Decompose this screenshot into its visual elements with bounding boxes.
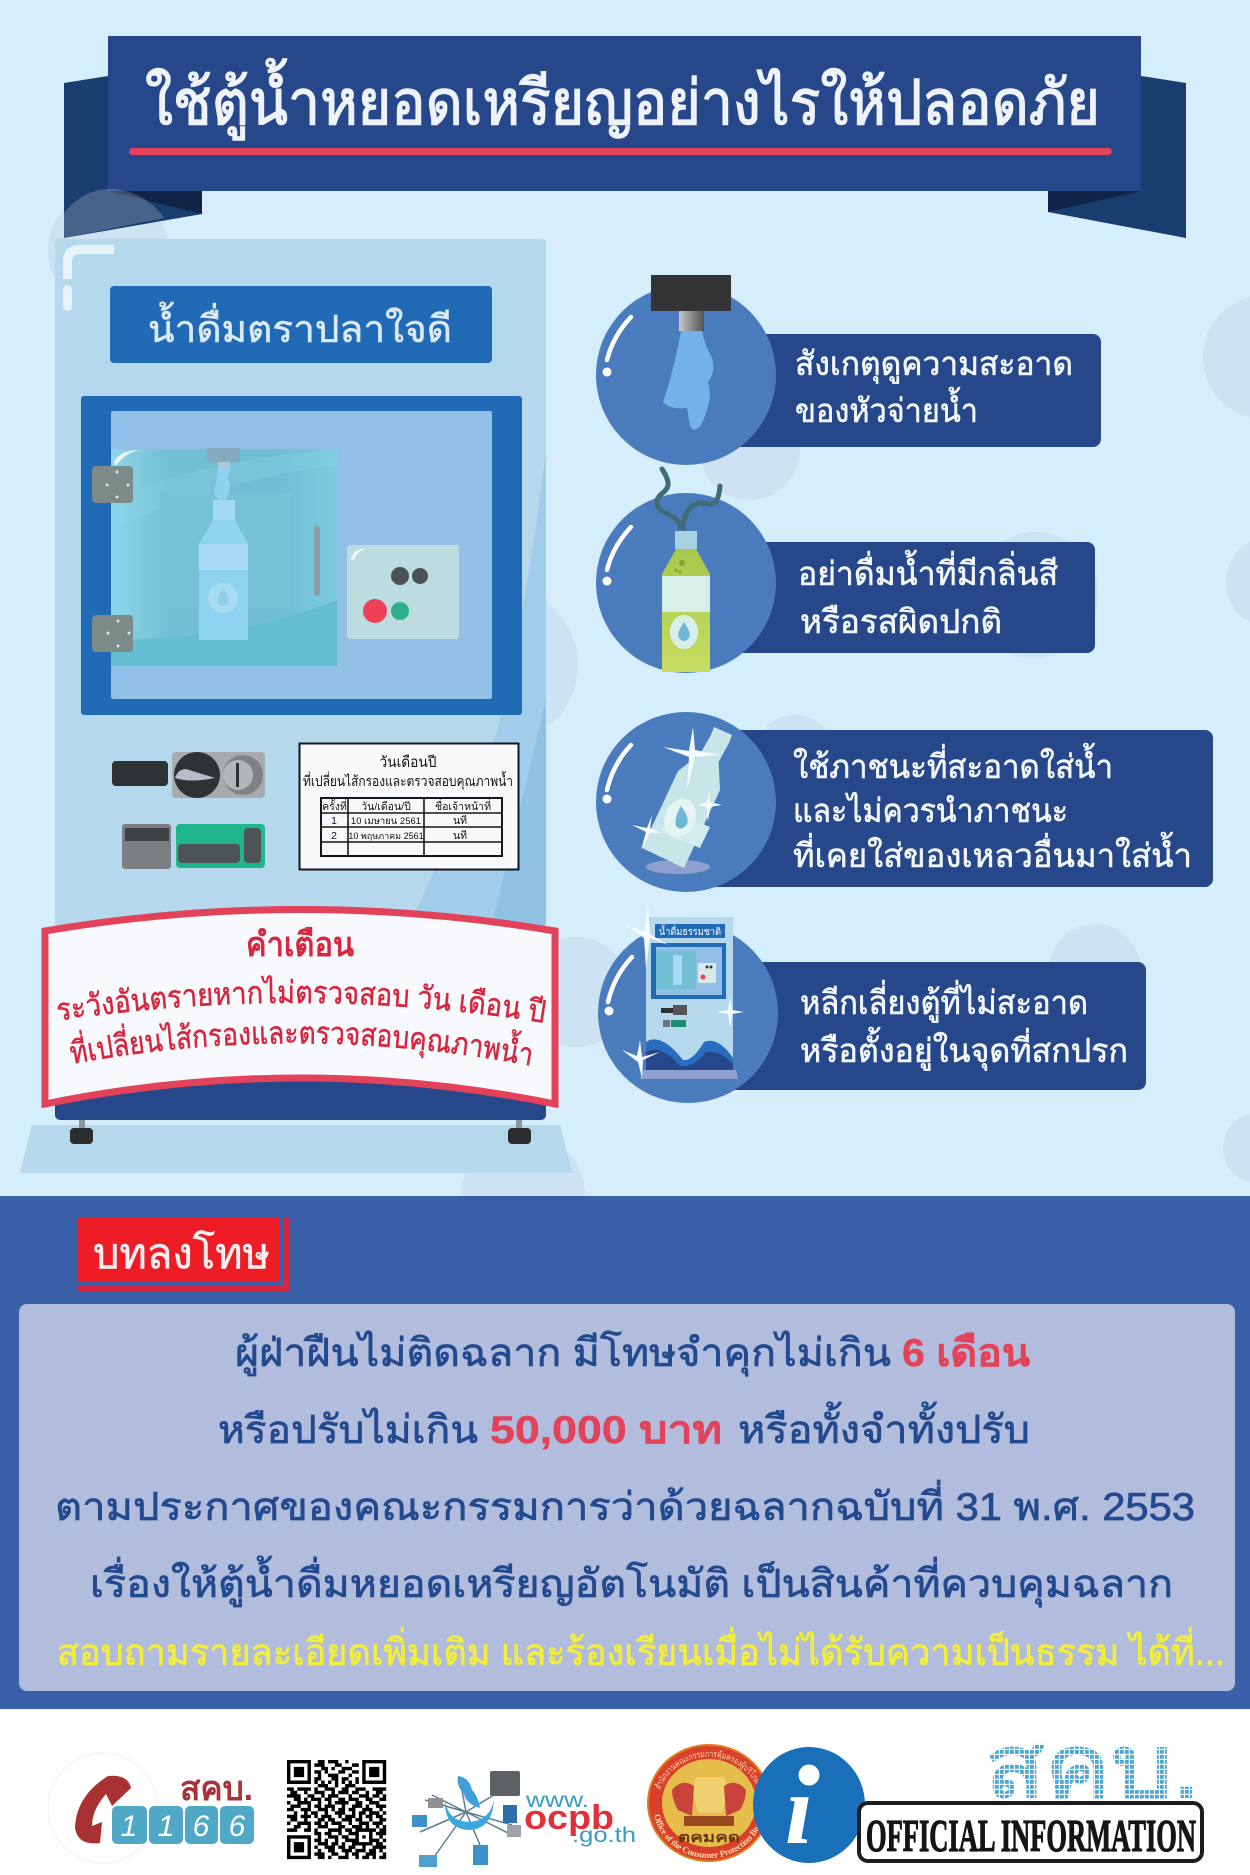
- odour wisps: [657, 469, 720, 528]
- penalties heading: บทลงโทษ: [93, 1229, 270, 1277]
- penalties panel: 50,000 บาท: [490, 1409, 722, 1452]
- warning sign: ที่เปลี่ยนไส้กรองและตรวจสอบคุณภาพน้ำ: [70, 1022, 532, 1066]
- QR code: [287, 1760, 386, 1859]
- warning sign: คำเตือน: [246, 926, 354, 964]
- information icon: ı: [785, 1754, 813, 1865]
- brand label: น้ำดื่มตราปลาใจดี: [148, 301, 452, 351]
- penalties panel: หรือปรับไม่เกิน: [218, 1408, 478, 1452]
- glass door: [92, 448, 337, 666]
- penalties panel: [19, 1304, 1235, 1691]
- service table: 10 เมษายน 2561: [351, 816, 421, 827]
- tip 3: clean container: และไม่ควรนำภาชนะ: [793, 792, 1068, 829]
- hotline logo: 6: [229, 1810, 246, 1843]
- penalties panel: ตามประกาศของคณะกรรมการว่าด้วยฉลากฉบับที่ 31 พ.ศ. 2553: [55, 1480, 1195, 1529]
- consumer protection seal: สำนักงานคณะกรรมการคุ้มครองผู้บริโภค: [654, 1750, 759, 1790]
- hotline logo: 1: [158, 1810, 174, 1843]
- tip 2: smelly bottle: หรือรสผิดปกติ: [800, 603, 1002, 640]
- seal emblem: [672, 1777, 746, 1826]
- hotline logo: [48, 1753, 254, 1863]
- glass highlight: [63, 245, 114, 311]
- button panel: [347, 545, 459, 639]
- machine body: [55, 239, 546, 1099]
- tip 2: smelly bottle: [596, 469, 1095, 673]
- mini vending machine: [640, 917, 738, 1079]
- coin slot: [112, 761, 168, 786]
- sparkles: [632, 727, 722, 850]
- consumer protection seal: [647, 1744, 762, 1862]
- door handle: [314, 525, 320, 596]
- hotline logo: 6: [193, 1810, 210, 1843]
- title underline: [129, 148, 1112, 155]
- service table: ครั้งที่: [322, 799, 347, 813]
- dotted agency wordmark: สคบ.: [985, 1717, 1200, 1816]
- information icon: [753, 1747, 865, 1865]
- tip 1: dispenser head: [596, 275, 1101, 465]
- mini vending machine: น้ำดื่มธรรมชาติ: [659, 924, 721, 938]
- penalties heading: [78, 1217, 290, 1292]
- consumer protection seal: ตคมคด: [678, 1829, 740, 1845]
- title ribbon: [64, 36, 1186, 238]
- title text: ใช้ตู้น้ำหยอดเหรียญอย่างไรให้ปลอดภัย: [145, 58, 1100, 140]
- floor shadow: [20, 1125, 572, 1173]
- vending machine: [20, 239, 572, 1173]
- website logo: ocpb: [524, 1799, 614, 1837]
- service table: 1: [331, 815, 337, 827]
- tip 1: dispenser head: ของหัวจ่ายน้ำ: [795, 387, 978, 429]
- penalties panel: 6 เดือน: [902, 1332, 1030, 1375]
- tip 2: smelly bottle: อย่าดื่มน้ำที่มีกลิ่นสี: [798, 550, 1058, 592]
- service table: [321, 798, 502, 856]
- service table: 10 พฤษภาคม 2561: [348, 831, 424, 841]
- penalties panel: เรื่องให้ตู้น้ำดื่มหยอดเหรียญอัตโนมัติ เป็นสินค้าที่ควบคุมฉลาก: [90, 1555, 1173, 1608]
- translucent bubble over ribbon: [64, 189, 164, 238]
- coin return plate: [172, 752, 265, 798]
- service table: วัน/เดือน/ปี: [361, 800, 411, 813]
- penalties panel: สอบถามรายละเอียดเพิ่มเติม และร้องเรียนเมื่อไม่ได้รับความเป็นธรรม ได้ที่...: [57, 1626, 1225, 1673]
- hotline logo: สคบ.: [180, 1770, 253, 1808]
- sparkles: [622, 905, 744, 1078]
- bill acceptor: [176, 824, 265, 868]
- service table: นที: [453, 829, 467, 842]
- website logo: .go.th: [572, 1824, 636, 1847]
- service table: ชื่อเจ้าหน้าที่: [435, 799, 491, 813]
- consumer protection seal: Office of the Consumer Protection Board: [654, 1814, 758, 1858]
- filter service notice: ที่เปลี่ยนไส้กรองและตรวจสอบคุณภาพน้ำ: [303, 771, 513, 790]
- brand label: [110, 286, 492, 363]
- penalties section: [0, 1196, 1250, 1709]
- nozzle and water stream: [207, 448, 240, 500]
- hotline logo: 1: [121, 1810, 137, 1843]
- bottle: [199, 500, 248, 640]
- door hinges: [92, 466, 133, 652]
- tip 4: clean machine: [598, 905, 1146, 1103]
- warning sign: ระวังอันตรายหากไม่ตรวจสอบ วัน เดือน ปี: [58, 975, 546, 1023]
- tip 3: clean container: ที่เคยใส่ของเหลวอื่นมาใส่น้ำ: [793, 832, 1192, 874]
- filter service notice: [300, 744, 518, 870]
- tip 3: clean container: [596, 712, 1213, 892]
- website logo: www.: [525, 1789, 589, 1812]
- coin tray: [122, 824, 171, 869]
- machine wheels: [70, 1118, 531, 1144]
- tip 1: dispenser head: สังเกตุดูความสะอาด: [795, 345, 1073, 384]
- penalties panel: หรือทั้งจำทั้งปรับ: [738, 1401, 1030, 1452]
- tip 4: clean machine: หลีกเลี่ยงตู้ที่ไม่สะอาด: [800, 980, 1088, 1023]
- warning sign: [42, 906, 558, 1108]
- tip 3: clean container: ใช้ภาชนะที่สะอาดใส่น้ำ: [793, 743, 1113, 785]
- footer: [0, 1709, 1250, 1875]
- service table: 2: [331, 830, 337, 842]
- background bubbles: [48, 190, 1250, 1257]
- dispenser window: [81, 396, 522, 715]
- service table: นที: [453, 814, 467, 827]
- filter service notice: วันเดือนปี: [380, 754, 436, 771]
- tip 4: clean machine: หรือตั้งอยู่ในจุดที่สกปรก: [800, 1027, 1128, 1071]
- penalties panel: ผู้ฝ่าฝืนไม่ติดฉลาก มีโทษจำคุกไม่เกิน: [235, 1331, 891, 1377]
- machine base: [55, 1060, 546, 1120]
- website logo: [412, 1771, 636, 1867]
